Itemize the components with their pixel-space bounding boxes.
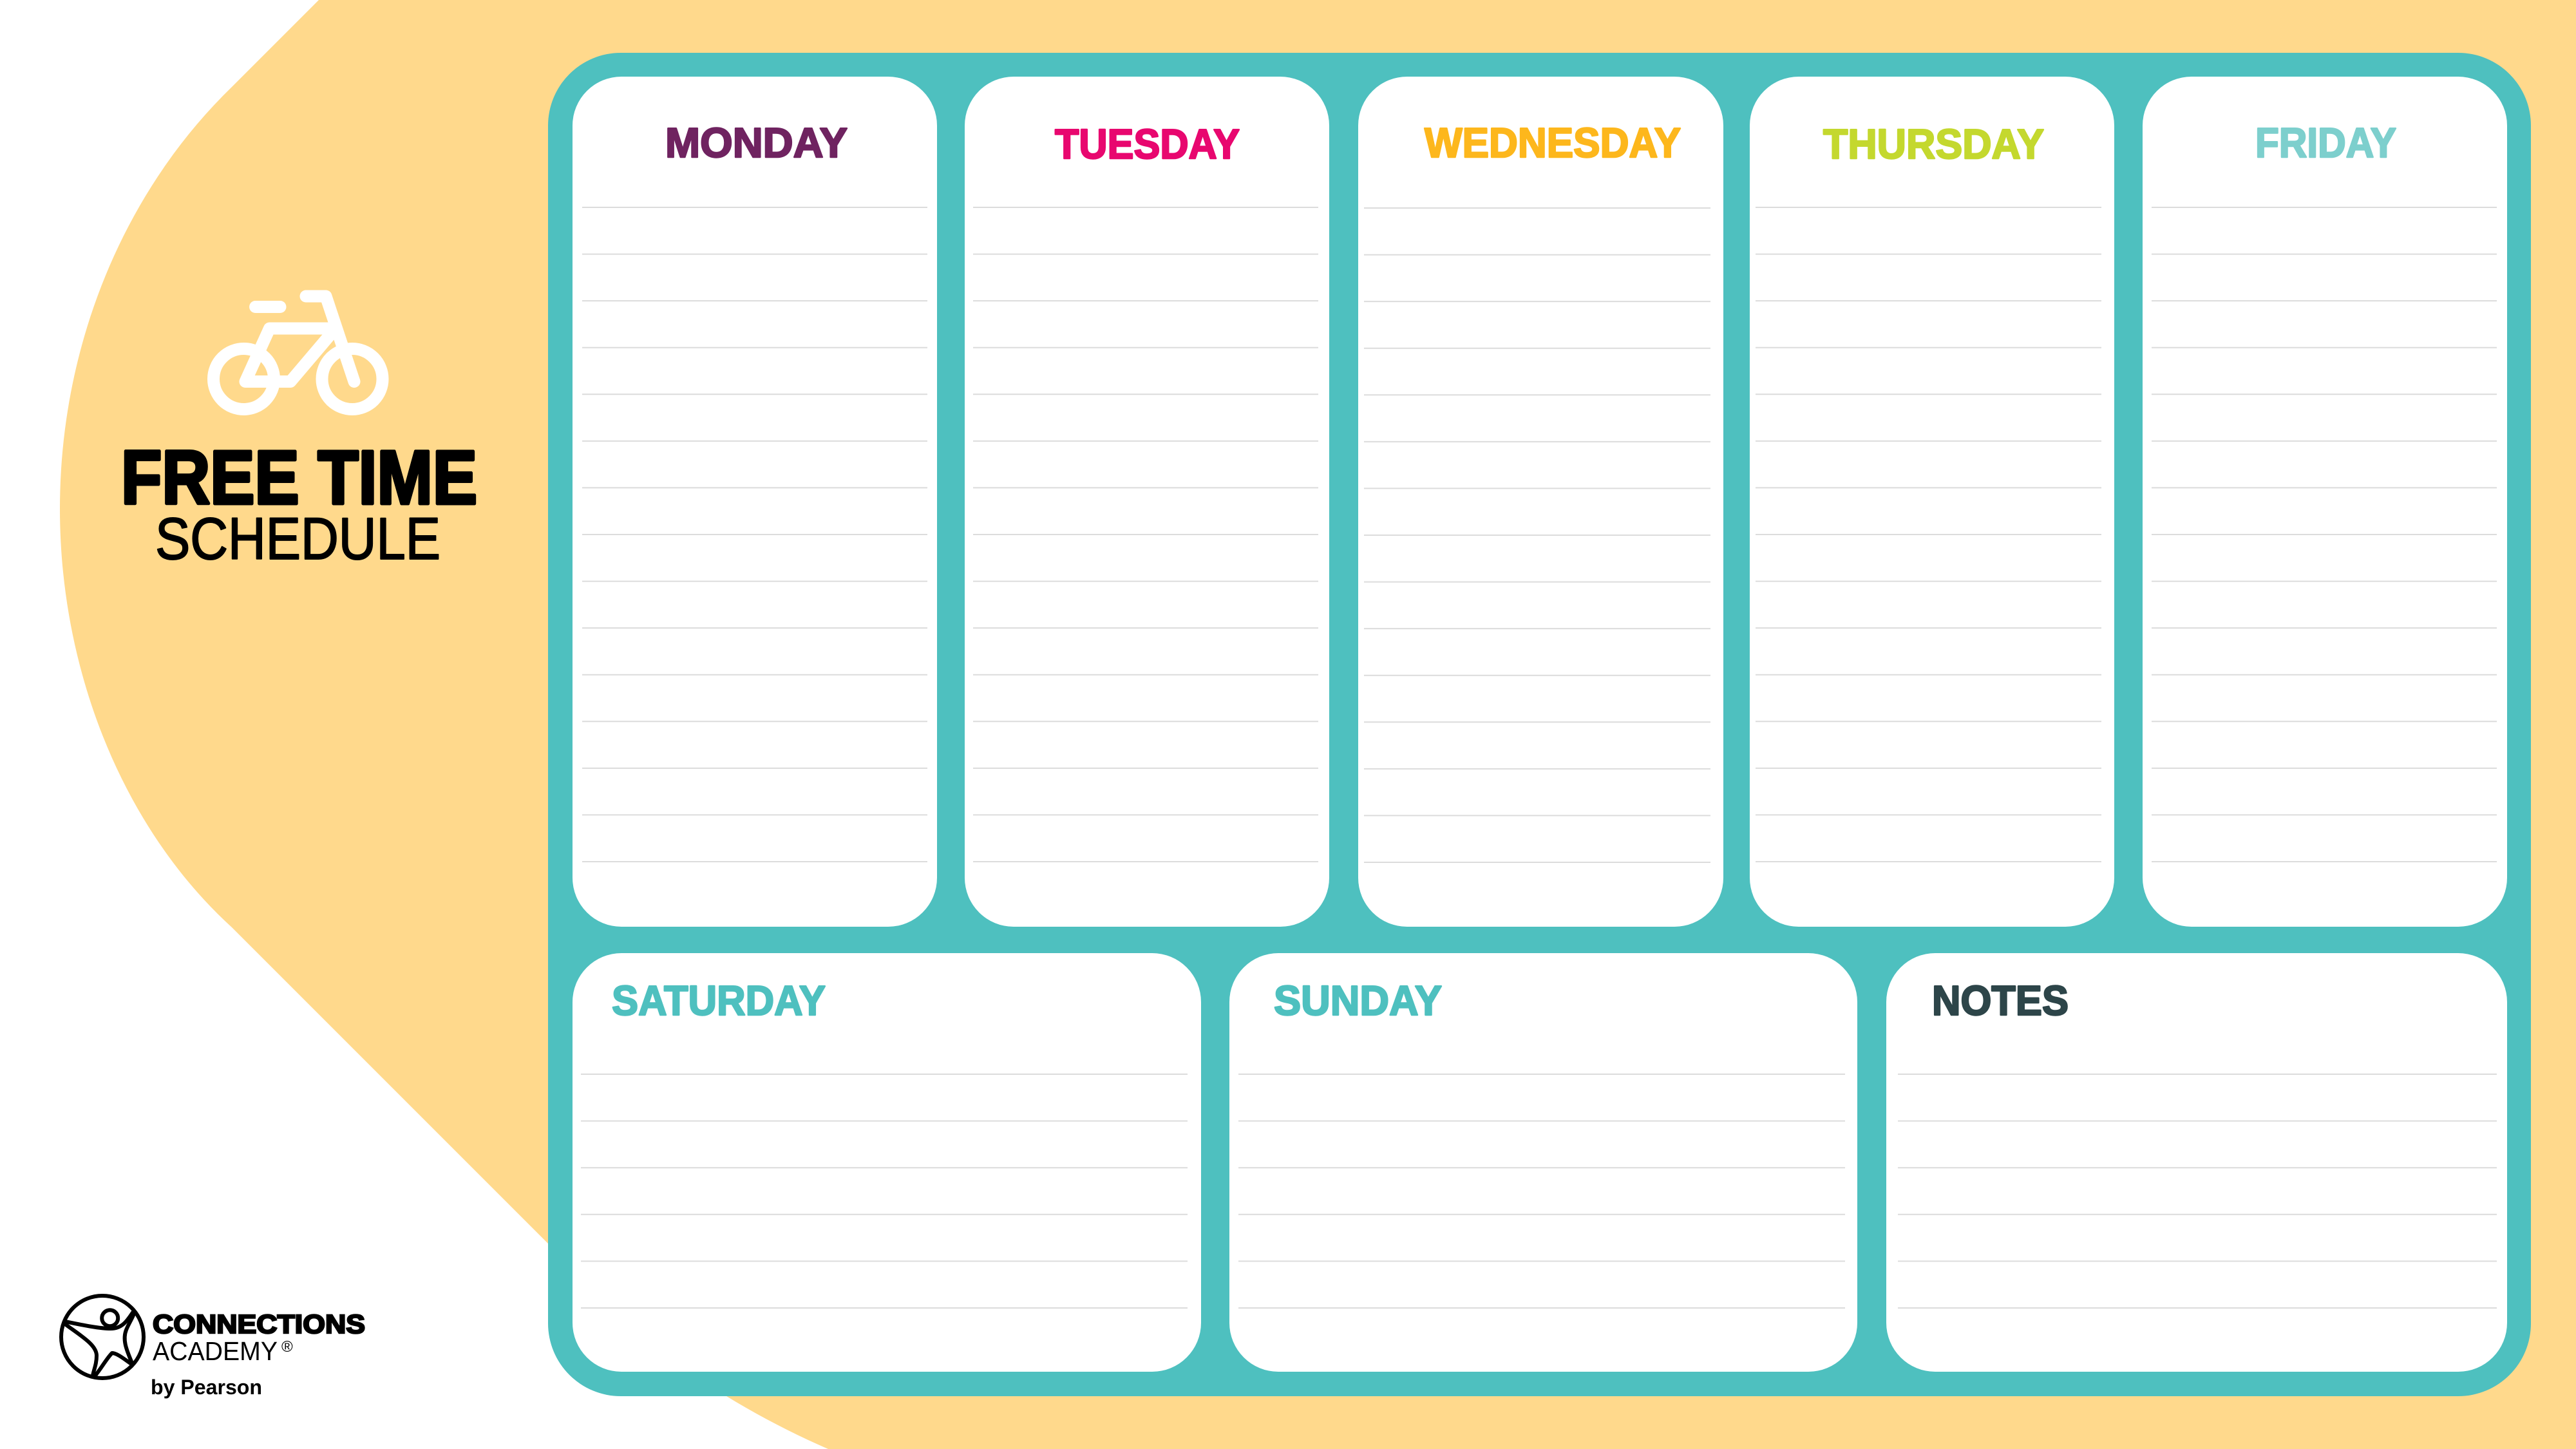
- panel: friday: [2143, 77, 2507, 927]
- panel: teal board: [548, 53, 2531, 1396]
- heading: sunday: SUNDAY: [1274, 977, 1442, 1024]
- icon: bicycle: [214, 296, 383, 410]
- panel: tuesday: [965, 77, 1329, 927]
- title: free time: FREE TIME: [121, 435, 477, 520]
- heading: saturday: SATURDAY: [612, 977, 826, 1024]
- panel: sunday: [1229, 953, 1857, 1372]
- heading: wednesday: WEDNESDAY: [1425, 119, 1681, 166]
- subtitle: schedule: SCHEDULE: [155, 506, 440, 572]
- panel: notes: [1886, 953, 2507, 1372]
- logo text: connections: CONNECTIONS: [153, 1309, 365, 1339]
- logo text: by pearson: by Pearson: [151, 1376, 262, 1399]
- heading: tuesday: TUESDAY: [1055, 120, 1240, 167]
- heading: monday: MONDAY: [665, 119, 848, 166]
- panel: monday: [573, 77, 937, 927]
- heading: friday: FRIDAY: [2255, 119, 2396, 166]
- icon: logo figure in circle: [61, 1296, 144, 1378]
- logo text: academy: ACADEMY: [153, 1336, 278, 1366]
- logo: connections academy: [61, 1296, 365, 1399]
- panel: thursday: [1750, 77, 2114, 927]
- heading: notes: NOTES: [1932, 977, 2069, 1024]
- heading: thursday: THURSDAY: [1823, 120, 2044, 167]
- logo text: registered mark: ®: [281, 1338, 293, 1356]
- panel: saturday: [573, 953, 1201, 1372]
- panel: wednesday: [1358, 77, 1723, 927]
